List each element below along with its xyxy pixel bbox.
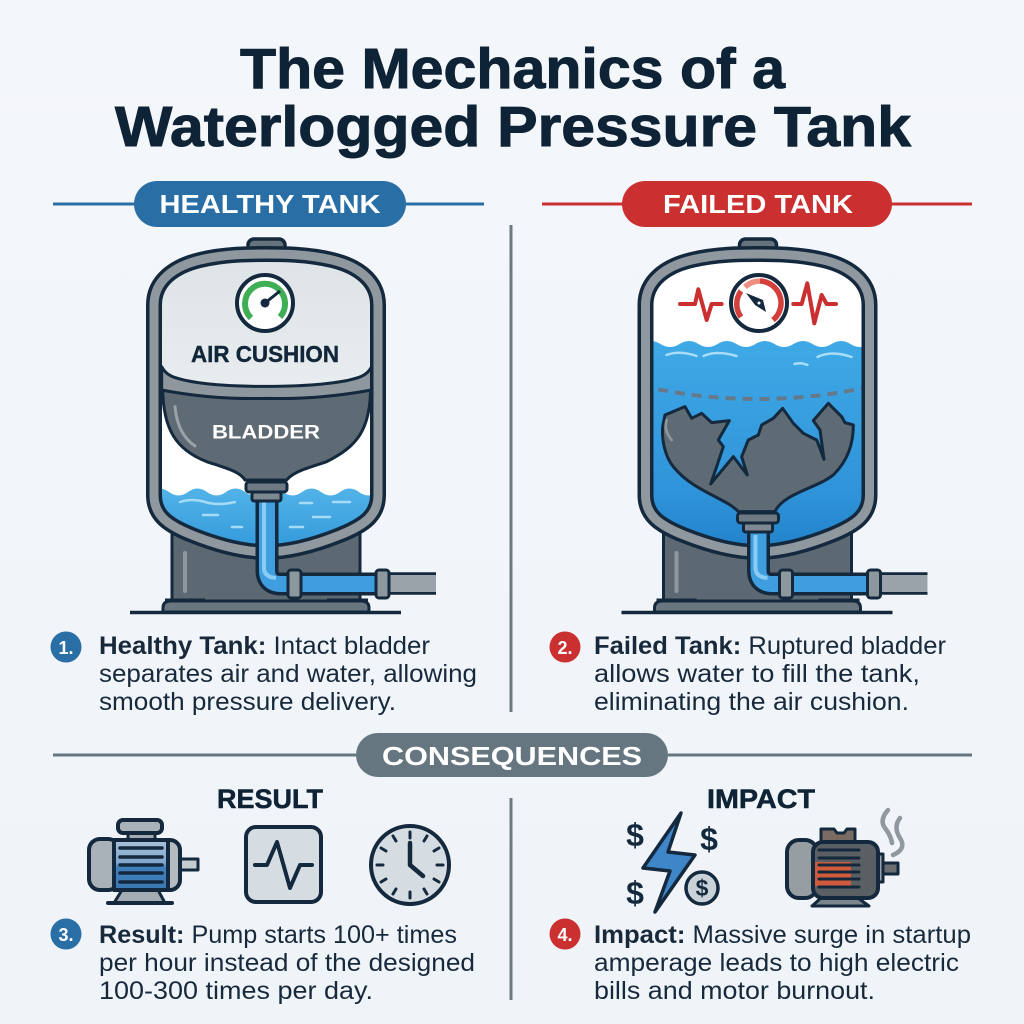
caption 1: healthy tank [50,632,477,716]
tank shell [154,254,378,552]
caption 4: impact [550,918,971,1005]
icon: pump motor [89,820,198,903]
caption 2: failed tank: allows water to fill the tank, [594,660,920,688]
caption 3: result: 3. [58,925,74,945]
tank stand [130,520,401,612]
heading: healthy tank: HEALTHY TANK [160,189,381,219]
title [115,37,911,159]
caption 4: impact: 4. [557,925,573,945]
subheading: result: RESULT [217,784,324,814]
pressure gauge: normal [237,275,293,331]
caption 2: failed tank: 2. [557,638,573,658]
caption 3: result: Result: Pump starts 100+ times [99,921,457,949]
caption 4: impact: bills and motor burnout. [594,977,875,1005]
ruptured bladder [662,403,853,512]
tank shell [646,254,870,552]
pressure spikes [680,283,836,323]
caption 1: healthy tank: separates air and water, allowing [99,660,477,688]
caption 1: healthy tank: 1. [58,638,74,658]
tank interior with water [654,262,862,544]
tank interior [162,262,370,544]
title: The Mechanics of a [240,37,786,101]
heading: healthy tank [53,181,484,227]
inlet pipe [738,513,928,598]
diagram: healthy tank [130,239,436,612]
icon: burnt motor [787,829,898,906]
bladder [162,367,372,480]
caption 2: failed tank: Failed Tank: Ruptured bladder [594,632,946,660]
diagram: failed tank [622,239,928,612]
caption 2: failed tank: eliminating the air cushion. [594,688,909,716]
heading: consequences [53,733,972,777]
heading: failed tank: FAILED TANK [663,189,853,219]
inlet pipe [246,482,436,598]
heading: failed tank [542,181,972,227]
caption 4: impact: amperage leads to high electric [594,949,959,977]
icon: pulse monitor [246,827,321,902]
icon: energy cost surge: $ [700,821,718,857]
icon: energy cost surge: $ [696,875,709,901]
caption 2: failed tank [550,632,946,716]
label: air cushion: AIR CUSHION [191,341,339,367]
subheading: impact: IMPACT [707,784,816,814]
tank cap [740,239,776,259]
icon: steam [883,810,902,855]
caption 3: result: per hour instead of the designed [99,949,475,977]
heading: consequences: CONSEQUENCES [382,741,642,771]
tank stand [622,520,892,612]
icon: energy cost surge: $ [626,817,644,853]
tank cap [248,239,285,259]
icon: clock [371,826,449,904]
caption 3: result: 100-300 times per day. [99,977,373,1005]
bladder: BLADDER [212,422,320,443]
caption 3: result [50,918,475,1005]
caption 1: healthy tank: smooth pressure delivery. [99,688,396,716]
pressure gauge: critical [731,275,787,331]
title: Waterlogged Pressure Tank [115,95,911,159]
icon: energy cost surge: $ [626,875,644,911]
caption 1: healthy tank: Healthy Tank: Intact bladder [99,632,430,660]
icon: energy cost surge [626,813,718,912]
caption 4: impact: Impact: Massive surge in startup [594,921,971,949]
